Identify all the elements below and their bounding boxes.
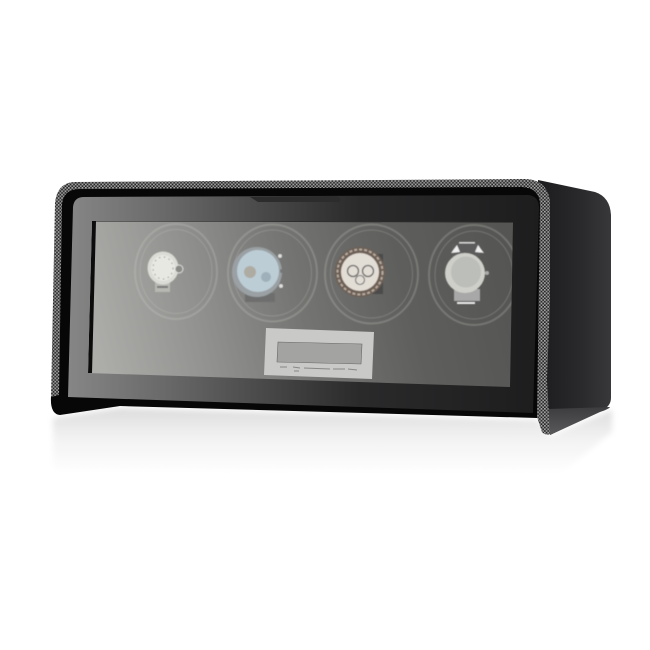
dark window left edge bbox=[88, 221, 96, 373]
watch 3 bbox=[335, 247, 385, 297]
ring 2 bbox=[228, 224, 317, 322]
display plate bbox=[264, 328, 374, 379]
ring 3 bbox=[325, 224, 418, 324]
button labels bbox=[280, 367, 357, 371]
LCD screen bbox=[277, 342, 362, 364]
glossy front panel bbox=[68, 195, 539, 413]
handle recess bbox=[250, 196, 340, 202]
window background bbox=[85, 218, 517, 390]
floor reflection bbox=[53, 408, 612, 474]
side panel lower highlight bbox=[548, 407, 610, 435]
dark window top edge bbox=[96, 221, 513, 222]
glass window bbox=[85, 218, 519, 390]
ring 4 bbox=[429, 225, 519, 325]
watch 1 bbox=[148, 252, 183, 292]
black front frame bbox=[51, 187, 540, 418]
box side panel bbox=[538, 180, 611, 435]
watch 2 bbox=[232, 247, 284, 302]
ring 1 bbox=[135, 224, 217, 319]
carbon fibre front trim bbox=[51, 179, 550, 435]
product illustration: four-watch winder box bbox=[50, 179, 614, 452]
watch 4 bbox=[445, 242, 489, 304]
winder rings bbox=[135, 224, 519, 325]
